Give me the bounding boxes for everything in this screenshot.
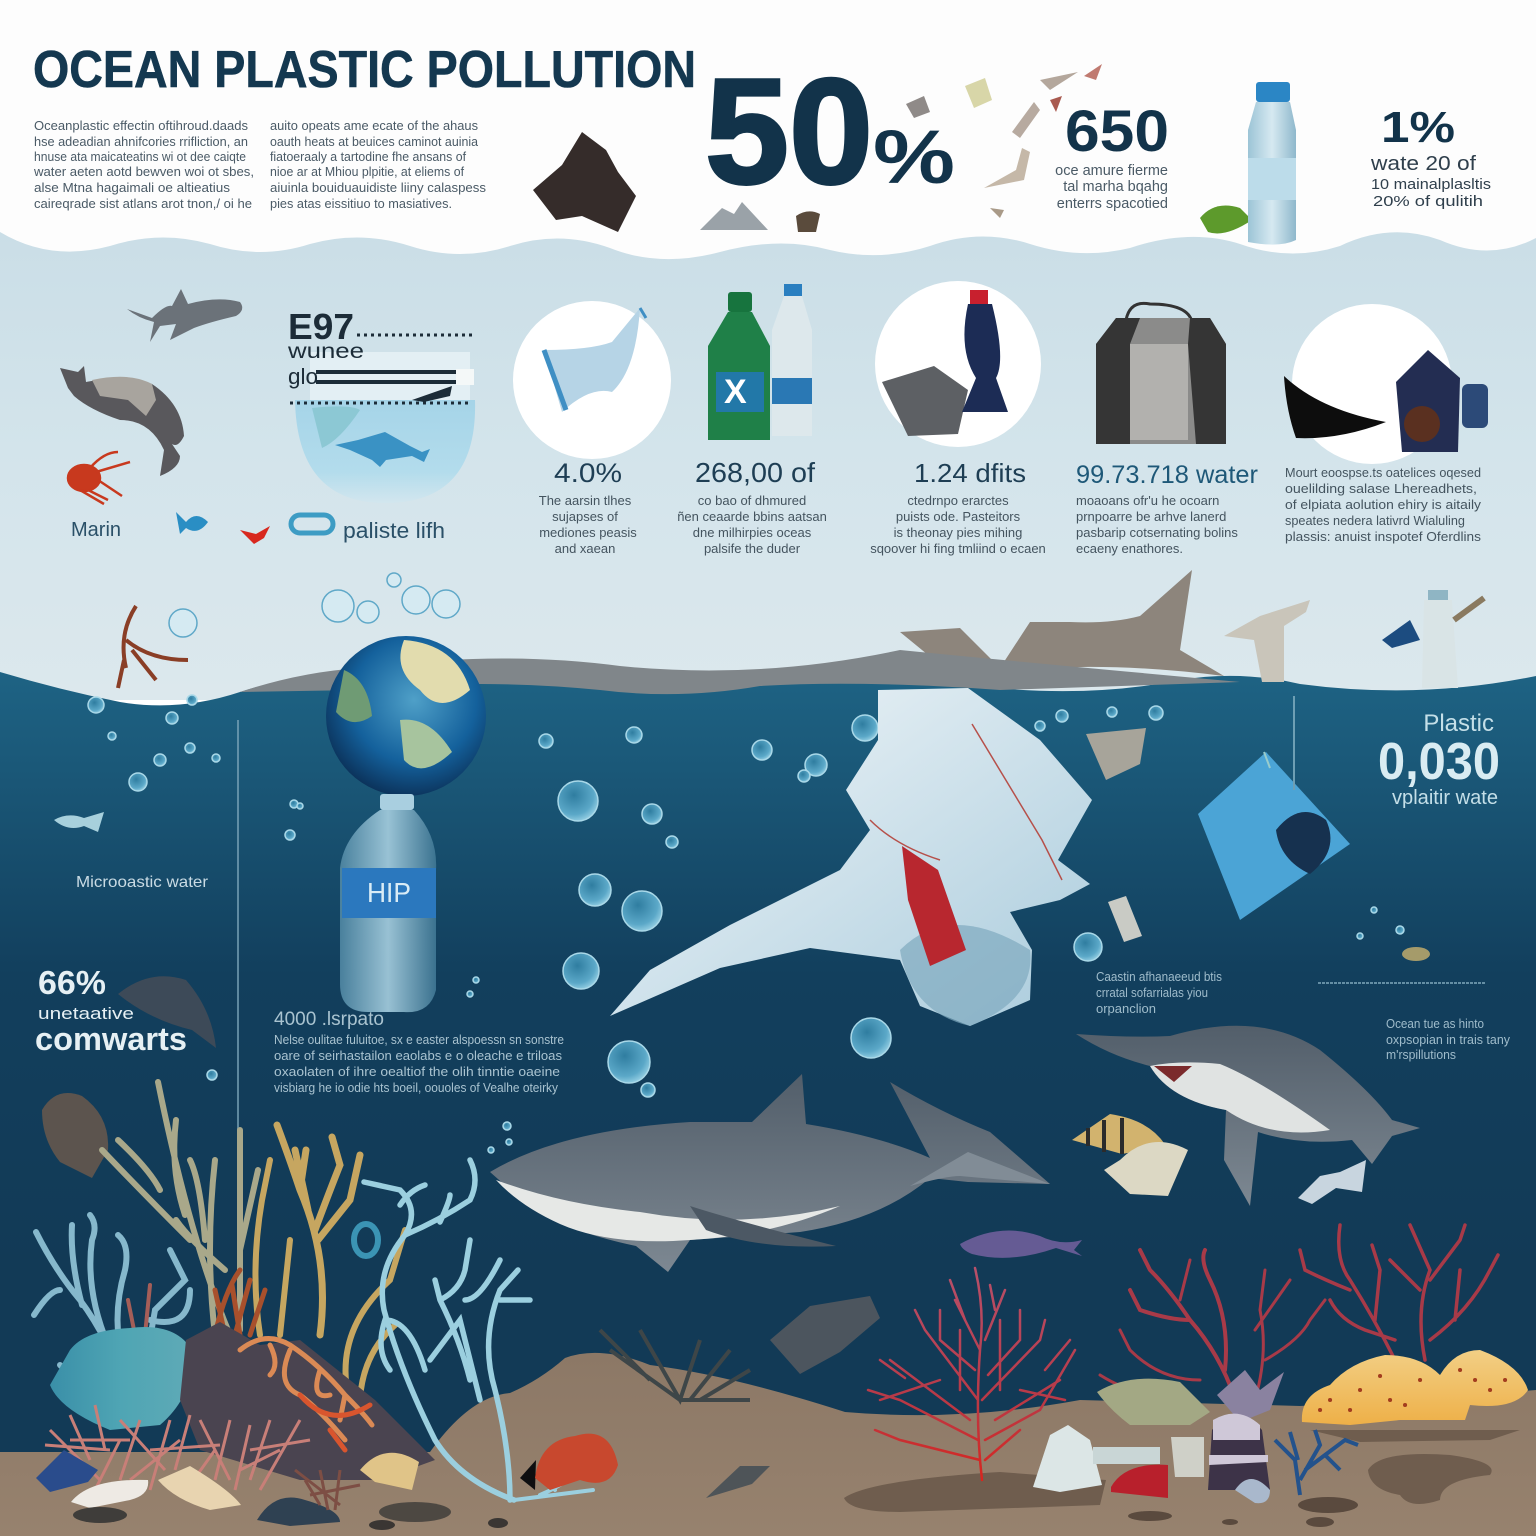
rocks: dark rock pile [180, 1322, 435, 1480]
stat: 650: enterrs spacotied [1057, 196, 1168, 212]
text block: intro right: oauth heats at beuices caminot auinia [270, 135, 478, 149]
stat: 0,030 plastic: 0,030 [1378, 733, 1500, 791]
coral: red fan coral [868, 1268, 1075, 1480]
text block: intro right: fiatoeraaly a tartodine fhe ansans of [270, 150, 467, 164]
text block: intro left: Oceanplastic effectin oftihroud.daads [34, 119, 248, 133]
stat column: water: moaoans ofr'u he ocoarn [1076, 493, 1219, 508]
coral: red small coral [535, 1434, 618, 1490]
stat: 66%: 66% [38, 964, 106, 1001]
icon: large plastic bag [610, 688, 1092, 1026]
text block: intro left [33, 119, 254, 211]
stat column: water [1076, 461, 1258, 556]
chart: water bowl with level lines: glo [288, 364, 318, 389]
stat: 0,030 plastic [1378, 710, 1500, 809]
coral: middle red branching coral [1100, 1250, 1325, 1415]
text block: 4000: 4000 .lsrpato [274, 1009, 384, 1030]
icon: large water bottle with label [340, 794, 436, 1012]
label: paliste lifh: paliste lifh [343, 518, 445, 543]
text block: intro left: caireqrade sist atlans arot tnon,/ oi he [34, 197, 252, 211]
stat column: 4.0%: mediones peasis [539, 525, 637, 540]
icon: green and clear bottles: X [724, 373, 747, 411]
stat: 1%: 1% [1381, 103, 1455, 152]
stat: 1%: wate 20 of [1370, 153, 1476, 175]
icon: dark fish [118, 976, 216, 1048]
stat: 650: 650 [1065, 99, 1169, 164]
text block: center right: crratal sofarrialas yiou [1096, 986, 1208, 1000]
stat column: 1.24 dfits: ctedrnpo erarctes [907, 493, 1009, 508]
icon: floating can [1108, 896, 1142, 942]
text block: far right [1386, 1017, 1511, 1062]
stat column: 268,00 of: dne milhirpies oceas [693, 525, 812, 540]
icon: small red fish [240, 526, 270, 544]
stat column: 4.0% [539, 458, 637, 556]
chart: water bowl with level lines: E97 [288, 306, 354, 347]
icon: grey plastic scrap [1086, 728, 1146, 780]
icon: blue ring on coral [354, 1224, 378, 1256]
icon: open-mouth shark [1076, 1026, 1420, 1206]
stat column: 4.0%: and xaean [555, 541, 615, 556]
panel: plastic bag circle [513, 301, 671, 459]
icon: green cap [1200, 206, 1252, 234]
stat: 50%: 50 [705, 47, 873, 215]
title: OCEAN PLASTIC POLLUTION [33, 41, 696, 99]
text block: 4000: visbiarg he io odie hts boeil, oouoles of Vealhe oteirky [274, 1081, 559, 1095]
icon: small brown cap [796, 211, 820, 232]
text block: intro right: pies atas eissitiuo to masiatives. [270, 197, 452, 211]
chart: water bowl with level lines: wunee [287, 340, 364, 363]
icon: small grey mountains [700, 202, 768, 230]
background: grey surface band [240, 650, 1240, 694]
text block: far right: Ocean tue as hinto [1386, 1017, 1484, 1031]
stat column: water: prnpoarre be arhve lanerd [1076, 509, 1226, 524]
coral: left teal coral mass [50, 1327, 192, 1430]
icon: earth globe [326, 636, 486, 796]
stat: 50%: % [873, 115, 955, 200]
icon: dark shell [42, 1093, 108, 1178]
icon: great shark [490, 1074, 1050, 1272]
stat column: 268,00 of: co bao of dhmured [698, 493, 806, 508]
text block: far right: oxpsopian in trais tany [1386, 1033, 1511, 1047]
stat: 0,030 plastic: vplaitir wate [1392, 787, 1498, 809]
text block: intro left: water aeten aotd bewven woi ot sbes, [33, 165, 254, 179]
stat column: 1.24 dfits: puists ode. Pasteitors [896, 509, 1021, 524]
background: light sky band [0, 200, 1536, 700]
coral: pink fan coral [45, 1405, 310, 1490]
coral: yellow sponge coral [1302, 1350, 1528, 1425]
text block: intro left: hse adeadian ahnifcories rrifliction, an [34, 135, 248, 149]
icon: small fish on sand [706, 1466, 770, 1498]
background: ocean water [0, 672, 1536, 1536]
text block: right column: plassis: anuist inspotef Oferdlins [1285, 529, 1482, 544]
stat column: water: ecaeny enathores. [1076, 541, 1183, 556]
background: sea floor [0, 1353, 1536, 1536]
stat: 0,030 plastic: Plastic [1423, 710, 1494, 737]
icon: scattered plastic fragments [906, 64, 1102, 218]
stat column: 4.0%: The aarsin tlhes [539, 493, 632, 508]
text block: intro right [270, 119, 486, 211]
icon: small blue fish [176, 512, 208, 534]
icon: blue ring [291, 515, 333, 533]
icon: dark shopping bag [1096, 303, 1226, 444]
icon: squid [118, 606, 188, 688]
text block: center right: orpanclion [1096, 1002, 1156, 1016]
stat column: 1.24 dfits: is theonay pies mihing [894, 525, 1022, 540]
text block: 4000 [274, 1009, 564, 1095]
text block: right column: Mourt eoospse.ts oatelices oqesed [1285, 465, 1481, 480]
icon: floating debris right [1224, 590, 1484, 688]
text block: 4000: oxaolaten of ihre oealtiof the olih tinntie oaeine [274, 1065, 560, 1079]
icon: red crab [68, 452, 130, 504]
text block: 4000: oare of seirhastailon eaolabs e o oleache e triloas [274, 1049, 562, 1063]
icon: plastic bottle top right [1248, 82, 1296, 245]
icon: grey shark small [127, 289, 242, 342]
text block: intro right: aiuinla bouiduauidiste liiny calaspess [270, 181, 486, 195]
stat column: water: 99.73.718 water [1076, 461, 1258, 489]
stat column: 1.24 dfits [870, 458, 1046, 556]
stat column: 4.0%: 4.0% [554, 458, 622, 488]
stat: 66% [35, 964, 187, 1057]
stat column: 1.24 dfits: sqoover hi fing tmliind o ecaen [870, 541, 1046, 556]
coral: right red branching coral [1300, 1225, 1498, 1360]
text block: intro left: hnuse ata maicateatins wi ot dee caiqte [34, 150, 246, 164]
coral: tan branching coral [102, 1082, 405, 1420]
text block: right column: of elpiata aolution ehiry is aitaily [1285, 497, 1482, 512]
stat column: water: pasbarip cotsernating bolins [1076, 525, 1238, 540]
text block: right column: ouelilding salase Lhereadhets, [1285, 481, 1477, 496]
stat column: 268,00 of: ñen ceaarde bbins aatsan [677, 509, 827, 524]
icon: dark plastic rock [533, 132, 636, 232]
stat: 650: tal marha bqahg [1063, 179, 1168, 195]
stat: 66%: comwarts [35, 1021, 187, 1057]
sand shadows [844, 1430, 1520, 1512]
label: microplastic water: Microoastic water [76, 874, 209, 891]
icon: green and clear bottles [708, 284, 812, 440]
bubbles [88, 573, 1404, 1153]
text block: right column: speates nedera lativrd Wialuling [1285, 513, 1465, 528]
stat: 1% [1370, 103, 1491, 210]
text block: far right: m'rspillutions [1386, 1048, 1456, 1062]
icon: whale globe [60, 366, 184, 476]
label: Marin: Marin [71, 519, 121, 541]
stat: 650: oce amure fierme [1055, 163, 1168, 179]
text block: intro left: alse Mtna hagaimali oe altieatius [34, 181, 230, 195]
panel: fishing net and dark bag circle [1284, 304, 1488, 464]
icon: striped fish [1072, 1114, 1188, 1196]
icon: tiny fish [1402, 947, 1430, 961]
debris on the sea floor [1033, 1370, 1358, 1527]
text block: intro right: nioe ar at Mhiou plpitie, at eliems of [270, 165, 465, 179]
stat: 650 [1055, 99, 1169, 212]
text block: center right [1096, 970, 1222, 1016]
divider line [237, 720, 239, 1130]
coral: dark grey coral [600, 1330, 750, 1400]
text block: right column [1285, 465, 1482, 544]
stat: 66%: unetaative [38, 1004, 134, 1023]
panel: dark bottle circle [875, 281, 1041, 447]
text block: 4000: Nelse oulitae fuluitoe, sx e easter alspoessn sn sonstre [274, 1033, 564, 1047]
icon: small patterned fish [1298, 1160, 1366, 1204]
stat column: 268,00 of: 268,00 of [695, 457, 815, 488]
coral: right light-blue coral [364, 1160, 593, 1500]
background: white header with wavy edge [0, 0, 1536, 259]
icon: grey shark fin at the surface [900, 570, 1224, 676]
icon: purple fish [960, 1231, 1082, 1258]
icon: small white fish [54, 812, 104, 832]
chart: water bowl with level lines [287, 306, 475, 503]
stat column: 268,00 of [677, 457, 827, 556]
shells and stones [36, 1450, 536, 1530]
stat column: 4.0%: sujapses of [552, 509, 618, 524]
icon: ray fish [770, 1296, 880, 1374]
stat: 1%: 10 mainalplasltis [1371, 176, 1491, 193]
icon: blue container [1198, 696, 1350, 920]
coral: orange coral [240, 1339, 372, 1450]
coral: left blue coral [34, 1215, 190, 1400]
stat: 1%: 20% of qulitih [1373, 193, 1483, 210]
stat column: 268,00 of: palsife the duder [704, 541, 801, 556]
text block: center right: Caastin afhanaeeud btis [1096, 970, 1222, 984]
text block: intro right: auito opeats ame ecate of the ahaus [270, 119, 478, 133]
stat column: 1.24 dfits: 1.24 dfits [914, 458, 1026, 488]
stat: 50% [705, 47, 955, 215]
icon: large water bottle with label: HIP [367, 877, 411, 908]
